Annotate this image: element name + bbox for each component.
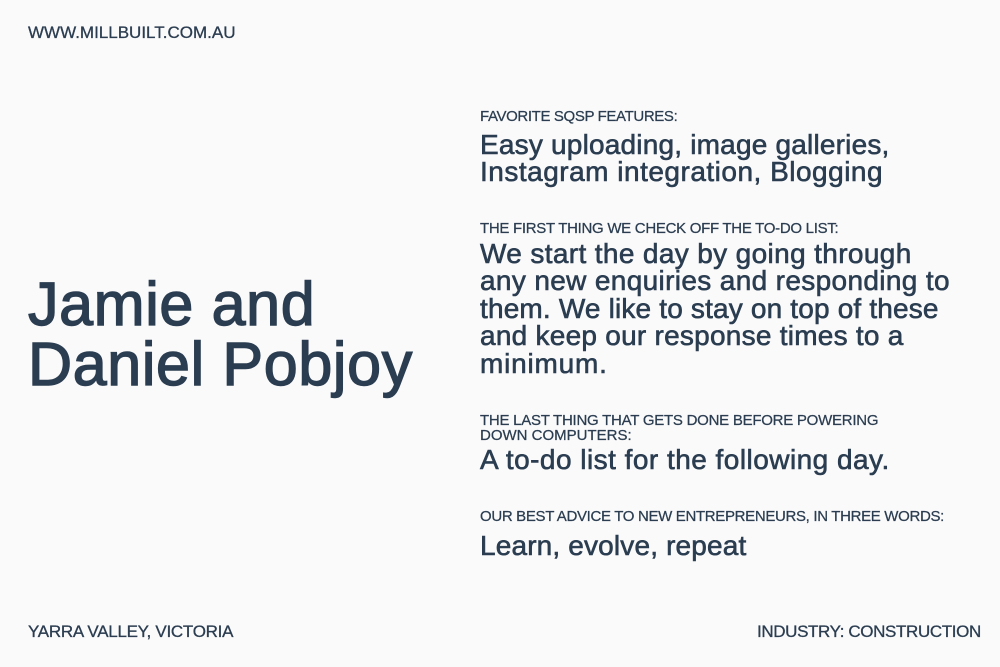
- answer: first thing: and keep our response times to a: [480, 320, 904, 351]
- industry: INDUSTRY: CONSTRUCTION: [757, 622, 981, 641]
- label: first thing: THE FIRST THING WE CHECK OFF THE TO-DO LIST:: [480, 220, 838, 237]
- answer: favorite features: Instagram integration, Blogging: [480, 156, 883, 187]
- title: Daniel Pobjoy: [28, 330, 413, 398]
- title: [28, 270, 414, 398]
- label: best advice: OUR BEST ADVICE TO NEW ENTREPRENEURS, IN THREE WORDS:: [480, 508, 944, 525]
- label: favorite features: FAVORITE SQSP FEATURES:: [480, 108, 677, 125]
- answer: best advice: Learn, evolve, repeat: [480, 530, 746, 561]
- title: Jamie and: [28, 270, 315, 338]
- answer: first thing: them. We like to stay on top of these: [480, 293, 939, 324]
- website url: WWW.MILLBUILT.COM.AU: [28, 23, 235, 42]
- location: YARRA VALLEY, VICTORIA: [28, 622, 233, 641]
- answer: favorite features: [480, 129, 890, 188]
- answer: first thing: any new enquiries and responding to: [480, 265, 950, 296]
- answer: first thing: minimum.: [480, 348, 608, 379]
- answer: favorite features: Easy uploading, image galleries,: [480, 129, 890, 160]
- label: last thing: THE LAST THING THAT GETS DONE BEFORE POWERING: [480, 412, 878, 429]
- label: last thing: DOWN COMPUTERS:: [480, 427, 632, 444]
- label: last thing: [480, 412, 878, 444]
- answer: first thing: We start the day by going through: [480, 238, 912, 269]
- answer: last thing: A to-do list for the following day.: [480, 444, 890, 475]
- answer: first thing: [480, 238, 950, 379]
